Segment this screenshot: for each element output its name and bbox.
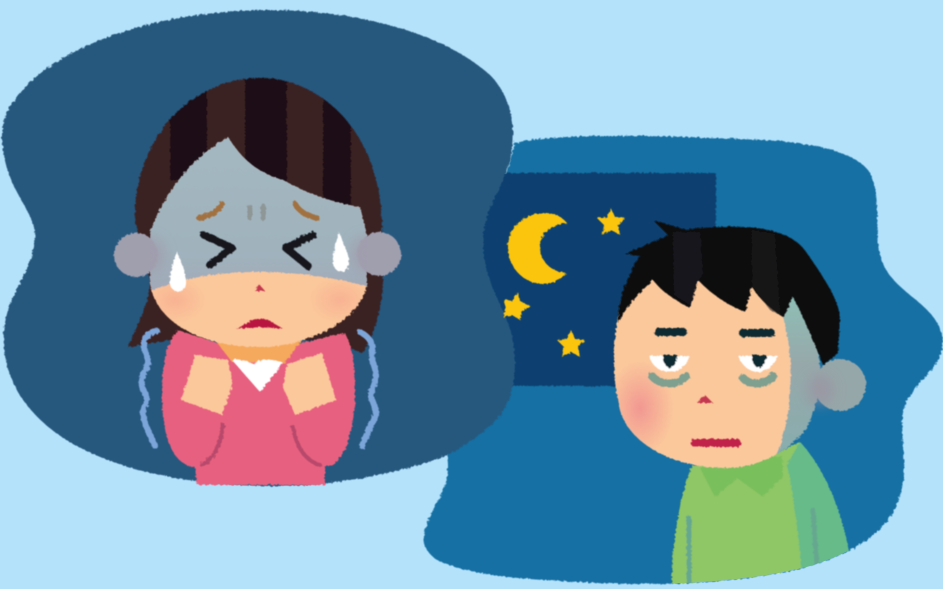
blue blob behind man <box>424 136 943 584</box>
woman <box>114 70 401 485</box>
woman ears <box>114 232 401 277</box>
woman face <box>148 136 368 348</box>
night window <box>470 173 716 386</box>
man eyebrows <box>654 328 775 337</box>
woman body <box>162 330 355 485</box>
stars <box>503 208 625 357</box>
man body <box>671 442 855 589</box>
woman hair <box>128 70 383 353</box>
woman closed eyes <box>204 235 313 266</box>
man hair <box>618 220 840 365</box>
man tired eyes <box>649 355 778 372</box>
woman neck and collar <box>215 340 302 392</box>
man ear <box>806 359 866 411</box>
shiver lines <box>141 331 376 446</box>
woman eyebrows and brow wrinkles <box>199 204 317 218</box>
woman tears <box>170 232 349 292</box>
dark blob behind woman <box>2 10 515 486</box>
moon <box>508 213 567 284</box>
man eye bags <box>652 376 773 384</box>
man <box>600 220 866 589</box>
man nose and mouth <box>691 395 741 447</box>
woman hands <box>181 353 336 415</box>
woman nose and mouth <box>236 284 284 329</box>
man face <box>612 279 821 470</box>
